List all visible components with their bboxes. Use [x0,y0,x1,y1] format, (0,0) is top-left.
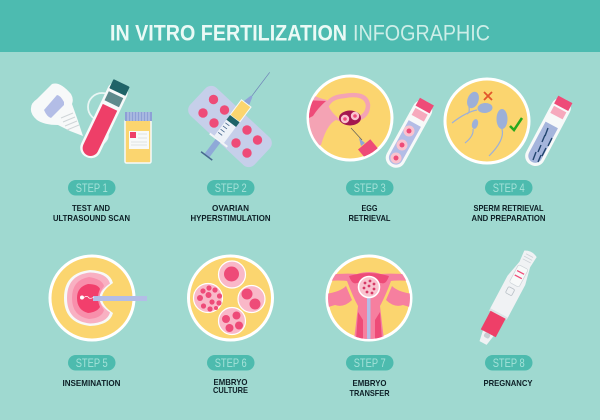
title: IN VITRO FERTILIZATION [110,20,347,46]
step name 1: ULTRASOUND SCAN [53,214,130,223]
step name 7: TRANSFER [350,389,390,398]
step badge 2: STEP 2 [215,183,247,195]
step name 3 [348,204,390,223]
step name 7: EMBRYO [352,379,387,388]
step badge 2 [207,180,254,196]
step name 2: OVARIAN [212,204,249,213]
panel: step 8 [474,247,540,388]
icon: sperm selection circle [445,79,529,163]
step badge 1: STEP 1 [76,183,108,195]
header band [0,0,600,52]
title suffix: INFOGRAPHIC [353,20,490,46]
step name 2 [190,204,271,223]
icon: test tube with sperm [522,95,574,169]
panel: step 3 [305,76,436,223]
step name 4: AND PREPARATION [472,214,546,223]
panel: step 5 [50,256,147,388]
step badge 8: STEP 8 [493,358,525,370]
step badge 4 [485,180,532,196]
step badge 6: STEP 6 [215,358,247,370]
step name 1: TEST AND [72,204,110,213]
icon: embryo culture dish [188,256,272,340]
icon: blister pack and syringe [185,66,278,170]
step badge 7: STEP 7 [354,358,386,370]
step badge 5: STEP 5 [76,358,108,370]
panel: step 6 [188,256,272,395]
step name 6 [213,378,248,395]
step badge 3: STEP 3 [354,183,386,195]
step name 3: EGG [362,204,378,213]
icon: ultrasound, blood tube and sample cup [31,78,152,163]
step name 4 [472,204,546,223]
step badge 3 [346,180,394,196]
icon: pregnancy test [474,247,540,348]
icon: uterus embryo transfer [325,256,413,340]
step name 7 [350,379,390,398]
step name 8: PREGNANCY [484,379,533,388]
step name 6: EMBRYO [214,378,248,387]
icon: insemination egg and pipette [50,256,147,340]
panel: step 2 [185,66,278,223]
step name 5: INSEMINATION [62,379,121,388]
step badge 4: STEP 4 [493,183,525,195]
icon: egg retrieval circle [305,76,392,160]
step badge 8 [485,355,532,370]
step badge 7 [346,355,394,370]
panel: step 4 [445,79,574,223]
step name 1 [53,204,130,223]
panel: step 1 [31,78,152,223]
icon: test tube with eggs [382,97,436,171]
step name 3: RETRIEVAL [348,214,390,223]
panel: step 7 [325,256,413,398]
step name 6: CULTURE [213,386,248,395]
step badge 1 [68,180,116,196]
step name 2: HYPERSTIMULATION [190,214,271,223]
step name 4: SPERM RETRIEVAL [474,204,544,213]
